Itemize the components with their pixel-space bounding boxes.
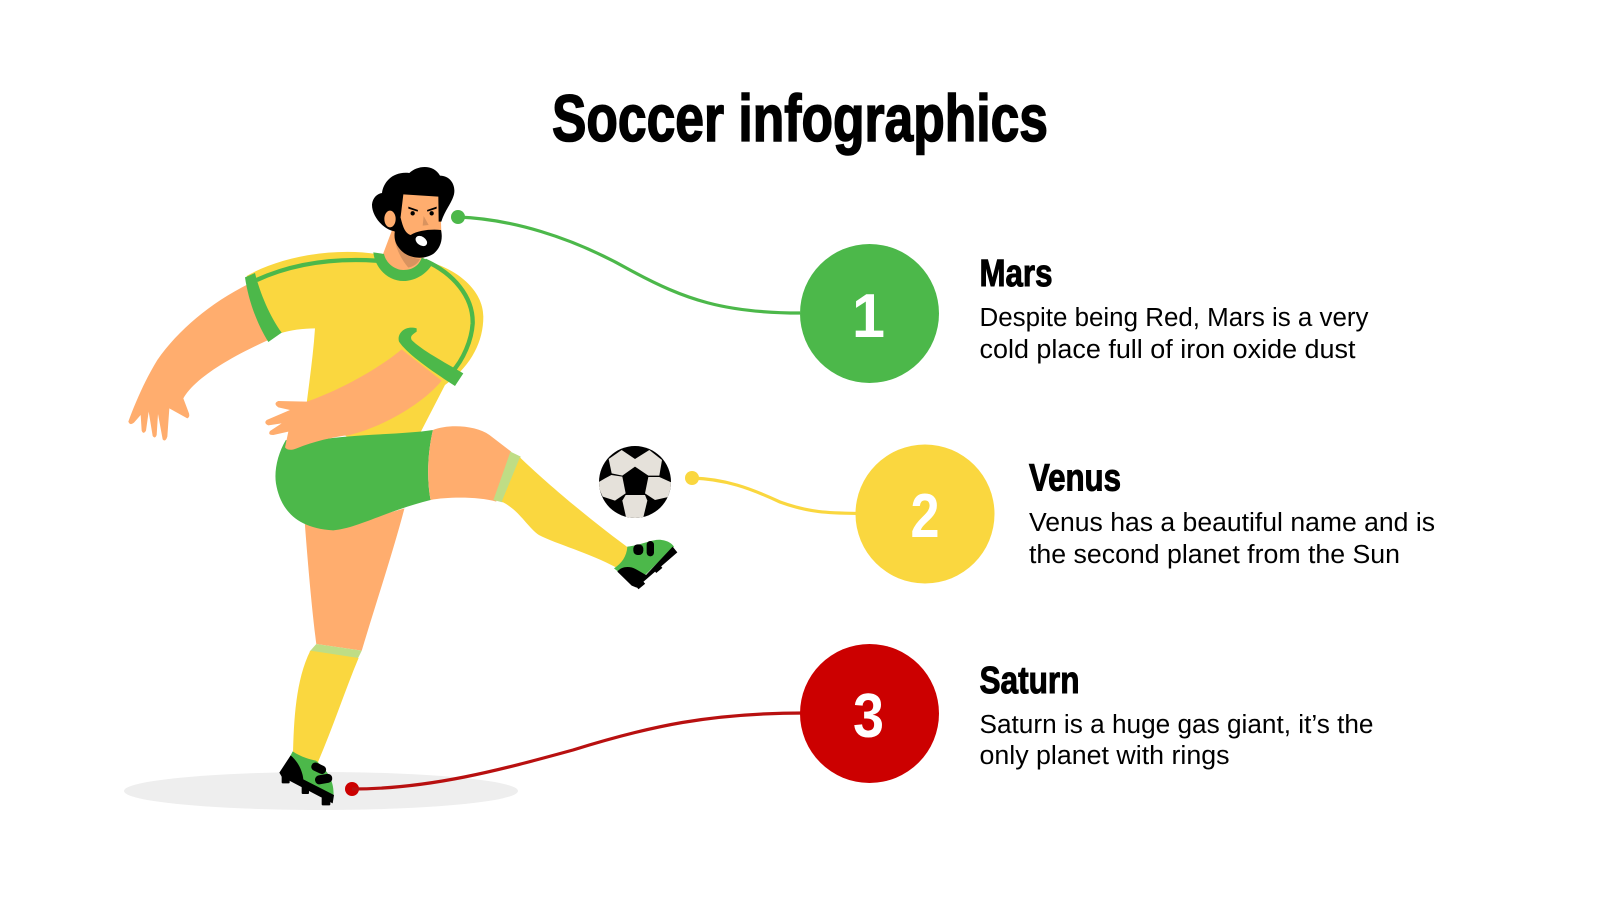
badge 2 bbox=[856, 444, 994, 584]
studs and stripes bbox=[633, 541, 662, 589]
shorts bbox=[275, 430, 433, 530]
upper body bbox=[128, 252, 483, 441]
Venus heading: Venus bbox=[1029, 458, 1121, 500]
Saturn description bbox=[980, 711, 1374, 770]
Venus description bbox=[1029, 509, 1435, 569]
Mars heading: Mars bbox=[980, 253, 1052, 295]
connector: Mars bbox=[451, 210, 800, 313]
badge 3 bbox=[800, 644, 939, 783]
ground shadow bbox=[124, 772, 518, 810]
face bbox=[399, 191, 441, 238]
ball base bbox=[599, 446, 671, 518]
collar bbox=[373, 252, 433, 281]
neck bbox=[383, 227, 424, 271]
arm cuff bbox=[399, 328, 463, 386]
sleeve cuff bbox=[245, 273, 282, 342]
connector: Venus bbox=[685, 471, 860, 514]
front arm bbox=[265, 328, 463, 450]
Mars description: Despite being Red, Mars is a very bbox=[980, 304, 1369, 332]
upper bbox=[288, 751, 334, 797]
raised boot bbox=[614, 540, 677, 589]
raised thigh bbox=[428, 426, 511, 502]
standing thigh bbox=[305, 508, 404, 651]
title: Soccer infographics bbox=[552, 81, 1048, 155]
neck shadow bbox=[395, 241, 420, 268]
studs and stripes bbox=[282, 761, 333, 805]
badge 2: 2 bbox=[910, 482, 940, 551]
soccer player illustration bbox=[128, 167, 677, 805]
standing sock band bbox=[310, 644, 362, 659]
ear bbox=[384, 211, 396, 227]
back arm bbox=[128, 284, 268, 441]
Venus description: the second planet from the Sun bbox=[1029, 541, 1400, 569]
eyes and brows bbox=[408, 207, 437, 215]
Mars description bbox=[980, 304, 1369, 364]
sole bbox=[617, 547, 677, 588]
soccer ball bbox=[597, 446, 673, 520]
legs and shorts bbox=[275, 426, 634, 763]
item 1: Mars bbox=[800, 244, 1369, 383]
ball panels bbox=[597, 450, 673, 520]
item 3: Saturn bbox=[800, 644, 1374, 783]
item 2: Venus bbox=[856, 444, 1435, 584]
connector: Saturn bbox=[345, 713, 805, 796]
Venus description: Venus has a beautiful name and is bbox=[1029, 509, 1435, 537]
upper bbox=[614, 540, 674, 585]
nose bbox=[423, 216, 429, 226]
standing sock bbox=[293, 651, 359, 763]
neck and head bbox=[372, 167, 454, 281]
Saturn heading: Saturn bbox=[980, 660, 1080, 702]
standing boot bbox=[279, 751, 334, 805]
forearm and hand bbox=[265, 349, 442, 450]
raised sock band bbox=[493, 452, 521, 502]
raised sock bbox=[502, 457, 634, 568]
Saturn description: only planet with rings bbox=[980, 742, 1230, 770]
sole bbox=[279, 755, 334, 803]
badge 3: 3 bbox=[853, 682, 884, 751]
Mars description: cold place full of iron oxide dust bbox=[980, 336, 1356, 364]
mouth bbox=[414, 234, 429, 248]
Saturn description: Saturn is a huge gas giant, it’s the bbox=[980, 711, 1374, 739]
jersey trim bbox=[257, 260, 473, 372]
jersey bbox=[247, 252, 483, 437]
hair bbox=[372, 167, 454, 232]
beard bbox=[395, 215, 442, 258]
badge 1: 1 bbox=[852, 282, 885, 351]
badge 1 bbox=[800, 244, 939, 383]
